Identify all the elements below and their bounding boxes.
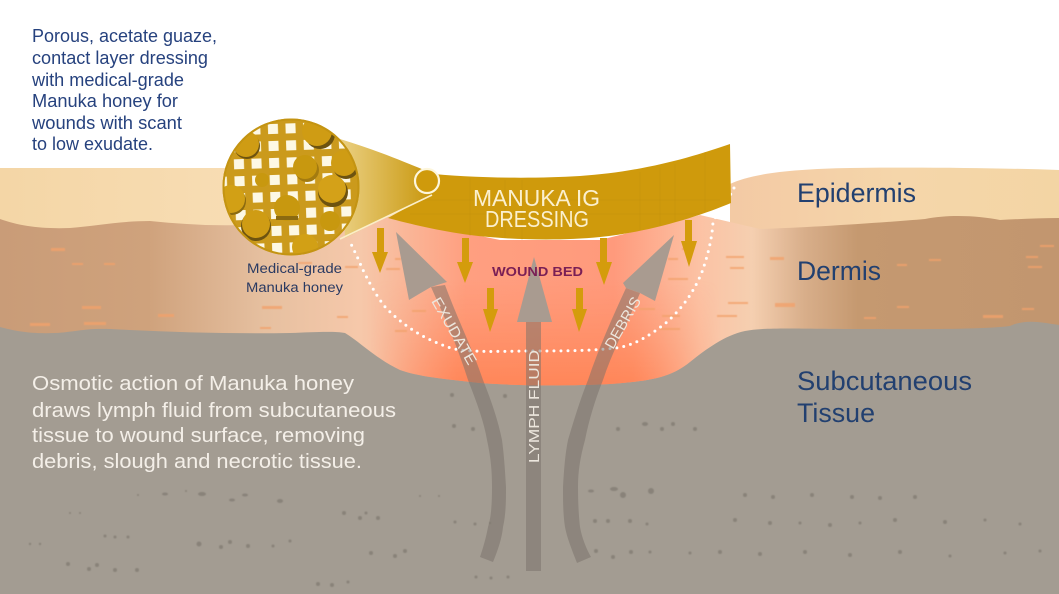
text block: osmotic action: debris, slough and necrotic tissue. <box>32 450 362 473</box>
text block: dressing description: wounds with scant <box>31 112 182 133</box>
gold arrow 5 <box>483 288 498 332</box>
label: wound bed: WOUND BED <box>492 264 583 279</box>
text block: dressing description: contact layer dressing <box>32 47 208 68</box>
text block: dressing description: Porous, acetate guaze, <box>32 25 217 46</box>
label: dermis: Dermis <box>797 256 881 286</box>
gold arrow 3 <box>596 238 612 285</box>
label: medical-grade manuka honey: Medical-grade <box>247 261 342 276</box>
gold magnifier cone <box>340 139 432 238</box>
dressing label: DRESSING <box>485 206 589 232</box>
layer: epidermis <box>0 168 1059 240</box>
text block: dressing description: to low exudate. <box>32 133 153 154</box>
magnified gauze circle <box>222 118 360 256</box>
label: medical-grade manuka honey: Manuka honey <box>246 280 343 295</box>
text block: dressing description <box>31 25 217 154</box>
wound bed lower glow <box>384 300 706 386</box>
label: subcutaneous tissue: Subcutaneous <box>797 366 972 396</box>
text block: osmotic action: Osmotic action of Manuka honey <box>32 372 355 395</box>
dressing label <box>473 185 600 232</box>
dermis fibre dashes <box>30 245 1054 332</box>
label: epidermis: Epidermis <box>797 178 916 208</box>
layer labels <box>797 178 972 428</box>
layer: subcutaneous tissue <box>0 322 1059 594</box>
gold arrow 4 <box>681 220 697 267</box>
text block: osmotic action: tissue to wound surface, removing <box>32 424 365 447</box>
dotted wound boundary <box>349 188 734 351</box>
label: exudate: EXUDATE <box>428 294 480 368</box>
text block: dressing description: Manuka honey for <box>32 90 178 111</box>
skin layers <box>0 168 1059 594</box>
arrow: lymph fluid <box>517 257 552 571</box>
text block: dressing description: with medical-grade <box>31 69 184 90</box>
label: subcutaneous tissue: Tissue <box>797 398 875 428</box>
arrow: debris <box>563 235 674 563</box>
text block: osmotic action <box>32 372 396 473</box>
manuka dressing <box>388 144 731 240</box>
gold arrow 6 <box>572 288 587 332</box>
subcutaneous speckles <box>29 393 1042 587</box>
dressing strip <box>388 144 731 239</box>
label: debris: DEBRIS <box>602 294 645 352</box>
label: lymph fluid: LYMPH FLUID <box>526 350 543 463</box>
label: medical-grade manuka honey <box>246 261 343 295</box>
dressing label: MANUKA IG <box>473 185 600 211</box>
label: subcutaneous tissue <box>797 366 972 428</box>
arrow labels <box>428 294 645 463</box>
layer: dermis and wound bed <box>0 215 1059 400</box>
weave texture <box>410 152 720 240</box>
magnifier target ring <box>415 169 439 193</box>
arrow: exudate <box>396 232 506 562</box>
cone lower edge <box>340 195 432 239</box>
gold arrow 1 <box>372 228 388 273</box>
gold arrow 2 <box>457 238 473 283</box>
text block: osmotic action: draws lymph fluid from subcutaneous <box>32 399 396 422</box>
gold osmotic arrows <box>372 220 697 332</box>
